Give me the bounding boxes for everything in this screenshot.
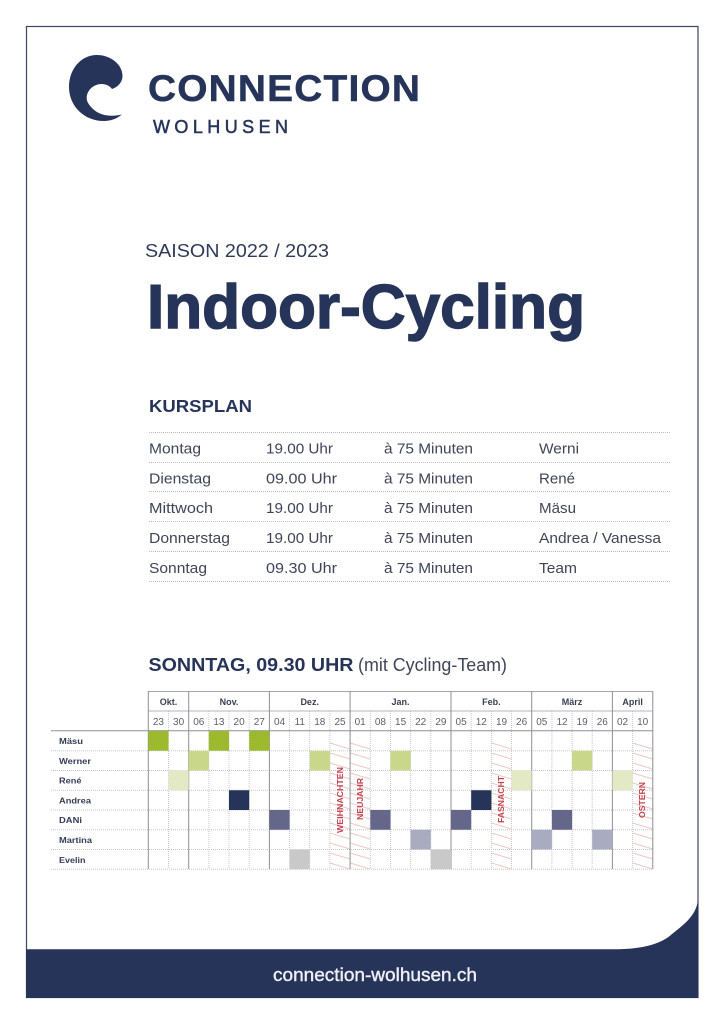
- month headers: Jan.: [391, 697, 410, 707]
- date headers: 10: [637, 717, 649, 728]
- footer band: [26, 900, 698, 998]
- grid lines: [51, 691, 653, 869]
- date headers: 05: [456, 717, 467, 728]
- month headers: [160, 697, 643, 707]
- row: Donnerstag: à 75 Minuten: [384, 530, 473, 547]
- row: Sonntag: à 75 Minuten: [384, 560, 473, 577]
- month headers: Dez.: [300, 697, 319, 707]
- cells: Martina: [411, 830, 612, 850]
- date headers: 30: [173, 717, 185, 728]
- row: Montag: 19.00 Uhr: [266, 440, 333, 458]
- row: Montag: à 75 Minuten: [384, 440, 473, 458]
- row: Mittwoch: Mäsu: [539, 500, 576, 517]
- logo name: CONNECTION: [148, 69, 420, 110]
- cells: René: [168, 770, 633, 790]
- date headers: 01: [355, 717, 366, 728]
- instructor names: Evelin: [59, 855, 86, 865]
- month headers: April: [622, 697, 643, 707]
- date headers: 25: [334, 717, 346, 728]
- date headers: 26: [516, 717, 528, 728]
- icon: wave: [69, 55, 122, 121]
- heading: Kursplan: KURSPLAN: [149, 396, 252, 416]
- row: Dienstag: à 75 Minuten: [384, 470, 473, 488]
- footer website: connection-wolhusen.ch: [273, 965, 477, 985]
- date headers: 19: [577, 717, 588, 728]
- instructor names: DANi: [59, 815, 82, 825]
- row: Dienstag: René: [539, 470, 575, 488]
- date headers: 11: [295, 717, 305, 728]
- holiday labels: [336, 767, 647, 833]
- holiday labels: FASNACHT: [497, 776, 506, 823]
- title: Indoor-Cycling: [147, 273, 585, 342]
- row: Mittwoch: Mittwoch: [149, 500, 213, 517]
- instructor names: Andrea: [59, 796, 91, 806]
- cells: Andrea: [229, 790, 491, 810]
- row: Donnerstag: [149, 530, 662, 547]
- date headers: 22: [415, 717, 427, 728]
- date headers: 04: [274, 717, 285, 728]
- row: Donnerstag: Donnerstag: [149, 530, 230, 547]
- date headers: 20: [234, 717, 245, 728]
- month headers: Okt.: [160, 697, 177, 707]
- row: Montag: Montag: [149, 440, 201, 458]
- schedule chart: [51, 691, 653, 869]
- instructor names: Werner: [59, 756, 92, 766]
- row: Mittwoch: 19.00 Uhr: [266, 500, 333, 517]
- date headers: 19: [496, 717, 507, 728]
- timetable: [149, 432, 670, 582]
- logo: [69, 55, 420, 137]
- cells: Mäsu: [148, 731, 269, 751]
- row: Donnerstag: 19.00 Uhr: [266, 530, 333, 547]
- row: Mittwoch: à 75 Minuten: [384, 500, 473, 517]
- date headers: 08: [375, 717, 386, 728]
- cells: Evelin: [290, 850, 451, 869]
- holiday labels: WEIHNACHTEN: [336, 767, 345, 833]
- holiday labels: NEUJAHR: [356, 778, 365, 820]
- date headers: 13: [213, 717, 225, 728]
- row: Donnerstag: Andrea / Vanessa: [539, 530, 662, 547]
- date headers: 18: [314, 717, 326, 728]
- instructor names: René: [59, 776, 82, 786]
- date headers: 12: [476, 717, 487, 728]
- date headers: 26: [597, 717, 608, 728]
- month headers: März: [562, 697, 583, 707]
- date headers: 12: [556, 717, 568, 728]
- row: Sonntag: [149, 560, 577, 577]
- row: Montag: [149, 440, 579, 458]
- season label: SAISON 2022 / 2023: [145, 240, 329, 261]
- logo subtitle: WOLHUSEN: [153, 117, 288, 137]
- holiday hatch columns: [330, 742, 653, 869]
- heading note: (mit Cycling-Team): [358, 655, 507, 675]
- date headers: [153, 717, 649, 728]
- instructor names: Martina: [59, 835, 92, 845]
- holiday labels: OSTERN: [638, 782, 647, 818]
- date headers: 29: [435, 717, 447, 728]
- month headers: Nov.: [220, 697, 238, 707]
- date headers: 05: [536, 717, 548, 728]
- instructor names: [59, 736, 92, 865]
- heading: Sonntag schedule: SONNTAG, 09.30 UHR: [148, 655, 354, 675]
- cells: DANi: [269, 810, 572, 830]
- date headers: 15: [395, 717, 407, 728]
- date headers: 02: [617, 717, 628, 728]
- date headers: 23: [153, 717, 164, 728]
- row: Dienstag: [149, 470, 575, 488]
- instructor names: Mäsu: [59, 736, 83, 746]
- row: Sonntag: Sonntag: [149, 560, 207, 577]
- date headers: 06: [193, 717, 205, 728]
- row: Dienstag: Dienstag: [149, 470, 211, 488]
- month headers: Feb.: [482, 697, 501, 707]
- row: Sonntag: Team: [539, 560, 577, 577]
- row: Sonntag: 09.30 Uhr: [266, 560, 337, 577]
- row: Montag: Werni: [539, 440, 579, 458]
- row: Dienstag: 09.00 Uhr: [266, 470, 337, 488]
- row: Mittwoch: [149, 500, 576, 517]
- date headers: 27: [254, 717, 265, 728]
- cells: Werner: [189, 751, 592, 770]
